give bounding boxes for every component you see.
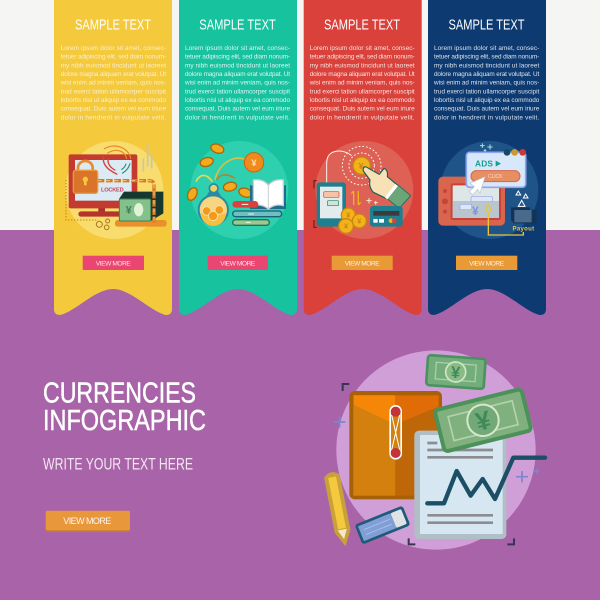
text block: teal panel: tetuer adipiscing elit, sed diam nonum- (185, 54, 290, 61)
text block: teal panel: my nibh euismod tincidunt ut laoreet (185, 62, 290, 69)
text block: yellow panel: tetuer adipiscing elit, sed diam nonum- (61, 54, 166, 61)
icon: coins flask and books: ¥ (251, 158, 257, 168)
icon: ads click and payout: CLICK (488, 174, 503, 180)
title: INFOGRAPHIC (43, 405, 206, 437)
text block: red panel: lobortis nisl ut aliquip ex ea commodo (310, 97, 415, 104)
button: teal panel view more: VIEW MORE (220, 260, 256, 267)
text block: yellow panel: my nibh euismod tincidunt ut laoreet (61, 62, 166, 69)
title: CURRENCIES (43, 377, 196, 409)
text block: navy panel (433, 45, 540, 121)
text block: yellow panel: dolor in hendrerit in vulputate velit. (61, 114, 166, 121)
panel: yellow locked money (54, 0, 172, 315)
icon: ads click and payout: Payout (512, 226, 534, 232)
icon: eraser (355, 505, 410, 545)
text block: teal panel: dolore magna aliquam erat volutpat. Ut (185, 71, 290, 78)
text block: yellow panel: Lorem ipsum dolor sit amet, consec- (61, 45, 166, 52)
icon: coins flask and books (186, 141, 288, 239)
text block: navy panel: consequat. Duis autem vel eum iriure (434, 106, 540, 113)
icon: locked computer and money: LOCKED (101, 187, 124, 193)
text block: navy panel: my nibh euismod tincidunt ut laoreet (434, 62, 540, 69)
text block: navy panel: Lorem ipsum dolor sit amet, consec- (434, 45, 539, 52)
icon: large banknote (434, 389, 531, 452)
title (43, 377, 206, 437)
icon: ads click and payout: ¥ (472, 204, 479, 218)
icon: document (414, 431, 506, 539)
button: red panel view more (332, 256, 393, 270)
text block: yellow panel: lobortis nisl ut aliquip ex ea commodo (61, 97, 166, 104)
text block: navy panel: dolor in hendrerit in vulputate velit. (434, 114, 540, 121)
panel: navy online ads (428, 0, 546, 315)
text block: navy panel: trud exerci tation ullamcorper suscipit (434, 88, 540, 95)
icon: small banknote: ¥ (450, 363, 462, 382)
icon: phone payment with hand (314, 141, 413, 239)
button: main view more: VIEW MORE (63, 516, 111, 526)
line chart (427, 458, 545, 503)
heading: teal panel: SAMPLE TEXT (199, 16, 276, 33)
heading: yellow panel: SAMPLE TEXT (75, 16, 151, 33)
panel: red mobile payment (304, 0, 422, 315)
text block: teal panel: Lorem ipsum dolor sit amet, consec- (185, 45, 290, 52)
text block: teal panel: dolor in hendrerit in vulputate velit. (185, 114, 290, 121)
button: navy panel view more: VIEW MORE (469, 260, 505, 267)
button: main view more (46, 511, 130, 532)
icon: envelope (349, 391, 442, 499)
text block: yellow panel (60, 45, 166, 121)
button: red panel view more: VIEW MORE (345, 260, 380, 267)
text block: red panel: dolor in hendrerit in vulputate velit. (310, 114, 415, 121)
icon: small banknote (426, 355, 486, 389)
panel: teal savings (179, 0, 297, 315)
text block: red panel: dolore magna aliquam erat volutpat. Ut (310, 71, 415, 78)
text block: yellow panel: consequat. Duis autem vel eum iriure (61, 106, 166, 113)
icon: ads click and payout: ADS (475, 159, 493, 169)
icon: phone payment with hand: ¥ (344, 222, 349, 231)
text block: navy panel: dolore magna aliquam erat volutpat. Ut (434, 71, 540, 78)
text block: red panel: trud exerci tation ullamcorper suscipit (310, 88, 415, 95)
icon: phone payment with hand: ¥ (346, 211, 351, 220)
icon: locked computer and money: ¥ (126, 205, 132, 217)
icon: large banknote: ¥ (472, 404, 494, 437)
text block: navy panel: wisi enim ad minim veniam, quis nos- (433, 80, 539, 87)
text block: yellow panel: trud exerci tation ullamcorper suscipit (61, 88, 166, 95)
button: navy panel view more (456, 256, 517, 270)
text block: red panel: my nibh euismod tincidunt ut laoreet (310, 62, 415, 69)
heading: navy panel: SAMPLE TEXT (448, 16, 524, 33)
button: yellow panel view more (83, 256, 144, 270)
text block: red panel: tetuer adipiscing elit, sed diam nonum- (310, 54, 415, 61)
text block: yellow panel: dolore magna aliquam erat volutpat. Ut (61, 71, 166, 78)
text block: red panel (309, 45, 415, 121)
icon: phone payment with hand: ¥ (359, 161, 364, 171)
text block: teal panel: lobortis nisl ut aliquip ex ea commodo (185, 97, 290, 104)
icon: background circle (336, 350, 536, 550)
text block: navy panel: lobortis nisl ut aliquip ex ea commodo (434, 97, 540, 104)
icon: phone payment with hand: ¥ (357, 217, 362, 226)
icon: locked computer and money (65, 141, 167, 239)
subtitle: WRITE YOUR TEXT HERE (43, 454, 193, 474)
icon: ads click and payout (438, 141, 538, 239)
text block: red panel: consequat. Duis autem vel eum iriure (310, 106, 415, 113)
illustration: envelope money document chart (323, 350, 545, 550)
text block: red panel: wisi enim ad minim veniam, quis nos- (309, 80, 415, 87)
heading: red panel: SAMPLE TEXT (324, 16, 400, 33)
icon: pencil (323, 471, 353, 548)
text block: navy panel: tetuer adipiscing elit, sed diam nonum- (434, 54, 539, 61)
text block: teal panel: consequat. Duis autem vel eum iriure (185, 106, 290, 113)
button: teal panel view more (208, 256, 268, 270)
text block: red panel: Lorem ipsum dolor sit amet, consec- (310, 45, 415, 52)
text block: teal panel: wisi enim ad minim veniam, quis nos- (184, 80, 290, 87)
button: yellow panel view more: VIEW MORE (96, 260, 131, 267)
text block: teal panel: trud exerci tation ullamcorper suscipit (185, 88, 290, 95)
text block: yellow panel: wisi enim ad minim veniam, quis nos- (60, 80, 166, 87)
text block: teal panel (184, 45, 290, 121)
